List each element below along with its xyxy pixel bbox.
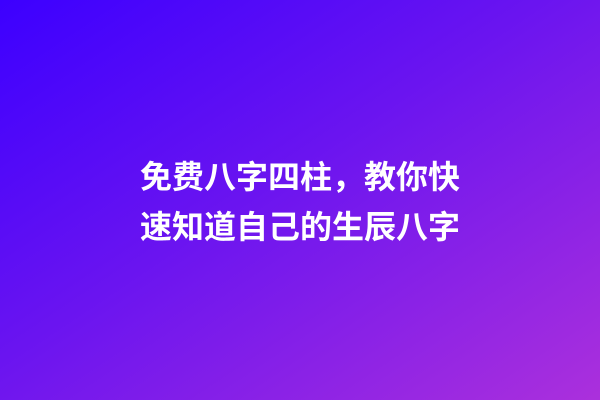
title: 速知道自己的生辰八字	[140, 209, 460, 245]
title: 免费八字四柱，教你快	[140, 159, 460, 195]
title	[140, 159, 460, 245]
